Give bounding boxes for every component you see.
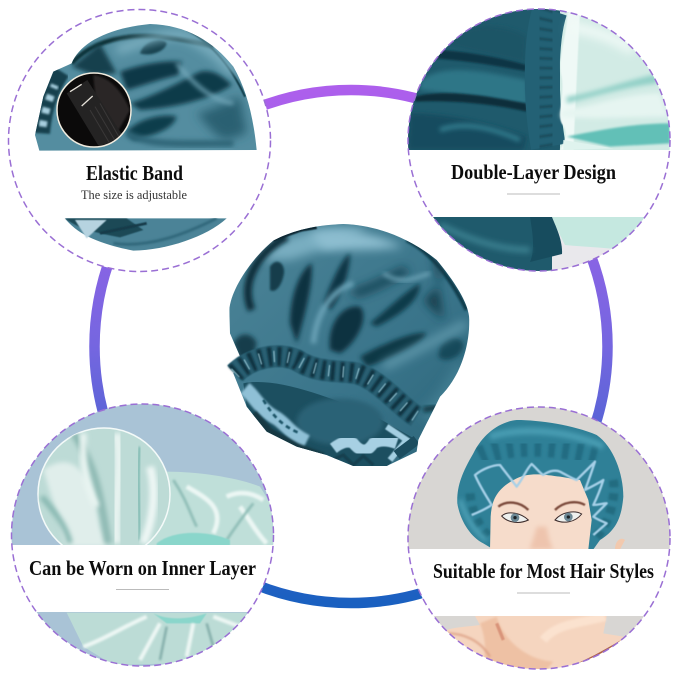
subtitle: The size is adjustable [81, 187, 187, 202]
eyes and brows [498, 502, 585, 510]
dashed outline [12, 404, 274, 666]
heading: double-layer design: Double-Layer Design [451, 160, 616, 184]
image: mint inner layer on blue [0, 400, 280, 670]
ruffle edge [472, 462, 607, 535]
caption band [65, 216, 218, 218]
caption band [400, 549, 679, 616]
inset: adjuster detail [57, 73, 131, 148]
caption band [5, 545, 280, 612]
heading: inner layer: Can be Worn on Inner Layer [29, 556, 256, 580]
heading: elastic band: Elastic Band [86, 161, 183, 185]
caption band [409, 150, 670, 154]
panel: double-layer design [407, 8, 671, 272]
elastic ruffle [235, 356, 417, 417]
face [490, 474, 592, 549]
divider [517, 592, 570, 594]
panel: hair styles [400, 400, 679, 676]
image: teal and mint layers [408, 9, 670, 271]
panel: elastic band [0, 10, 280, 272]
dashed outline [8, 10, 270, 272]
dashed outline [408, 407, 670, 669]
divider [507, 194, 560, 195]
inset: satin lining detail [38, 428, 170, 560]
central satin bonnet [223, 220, 473, 470]
image: bonnet with elastic band [35, 24, 257, 251]
connecting ring [94, 90, 608, 603]
divider [116, 589, 169, 590]
dashed outline [408, 9, 670, 271]
bonnet [457, 420, 623, 549]
image: model wearing bonnet [408, 407, 670, 669]
panel: inner layer [0, 400, 280, 670]
opening underside [243, 382, 417, 467]
